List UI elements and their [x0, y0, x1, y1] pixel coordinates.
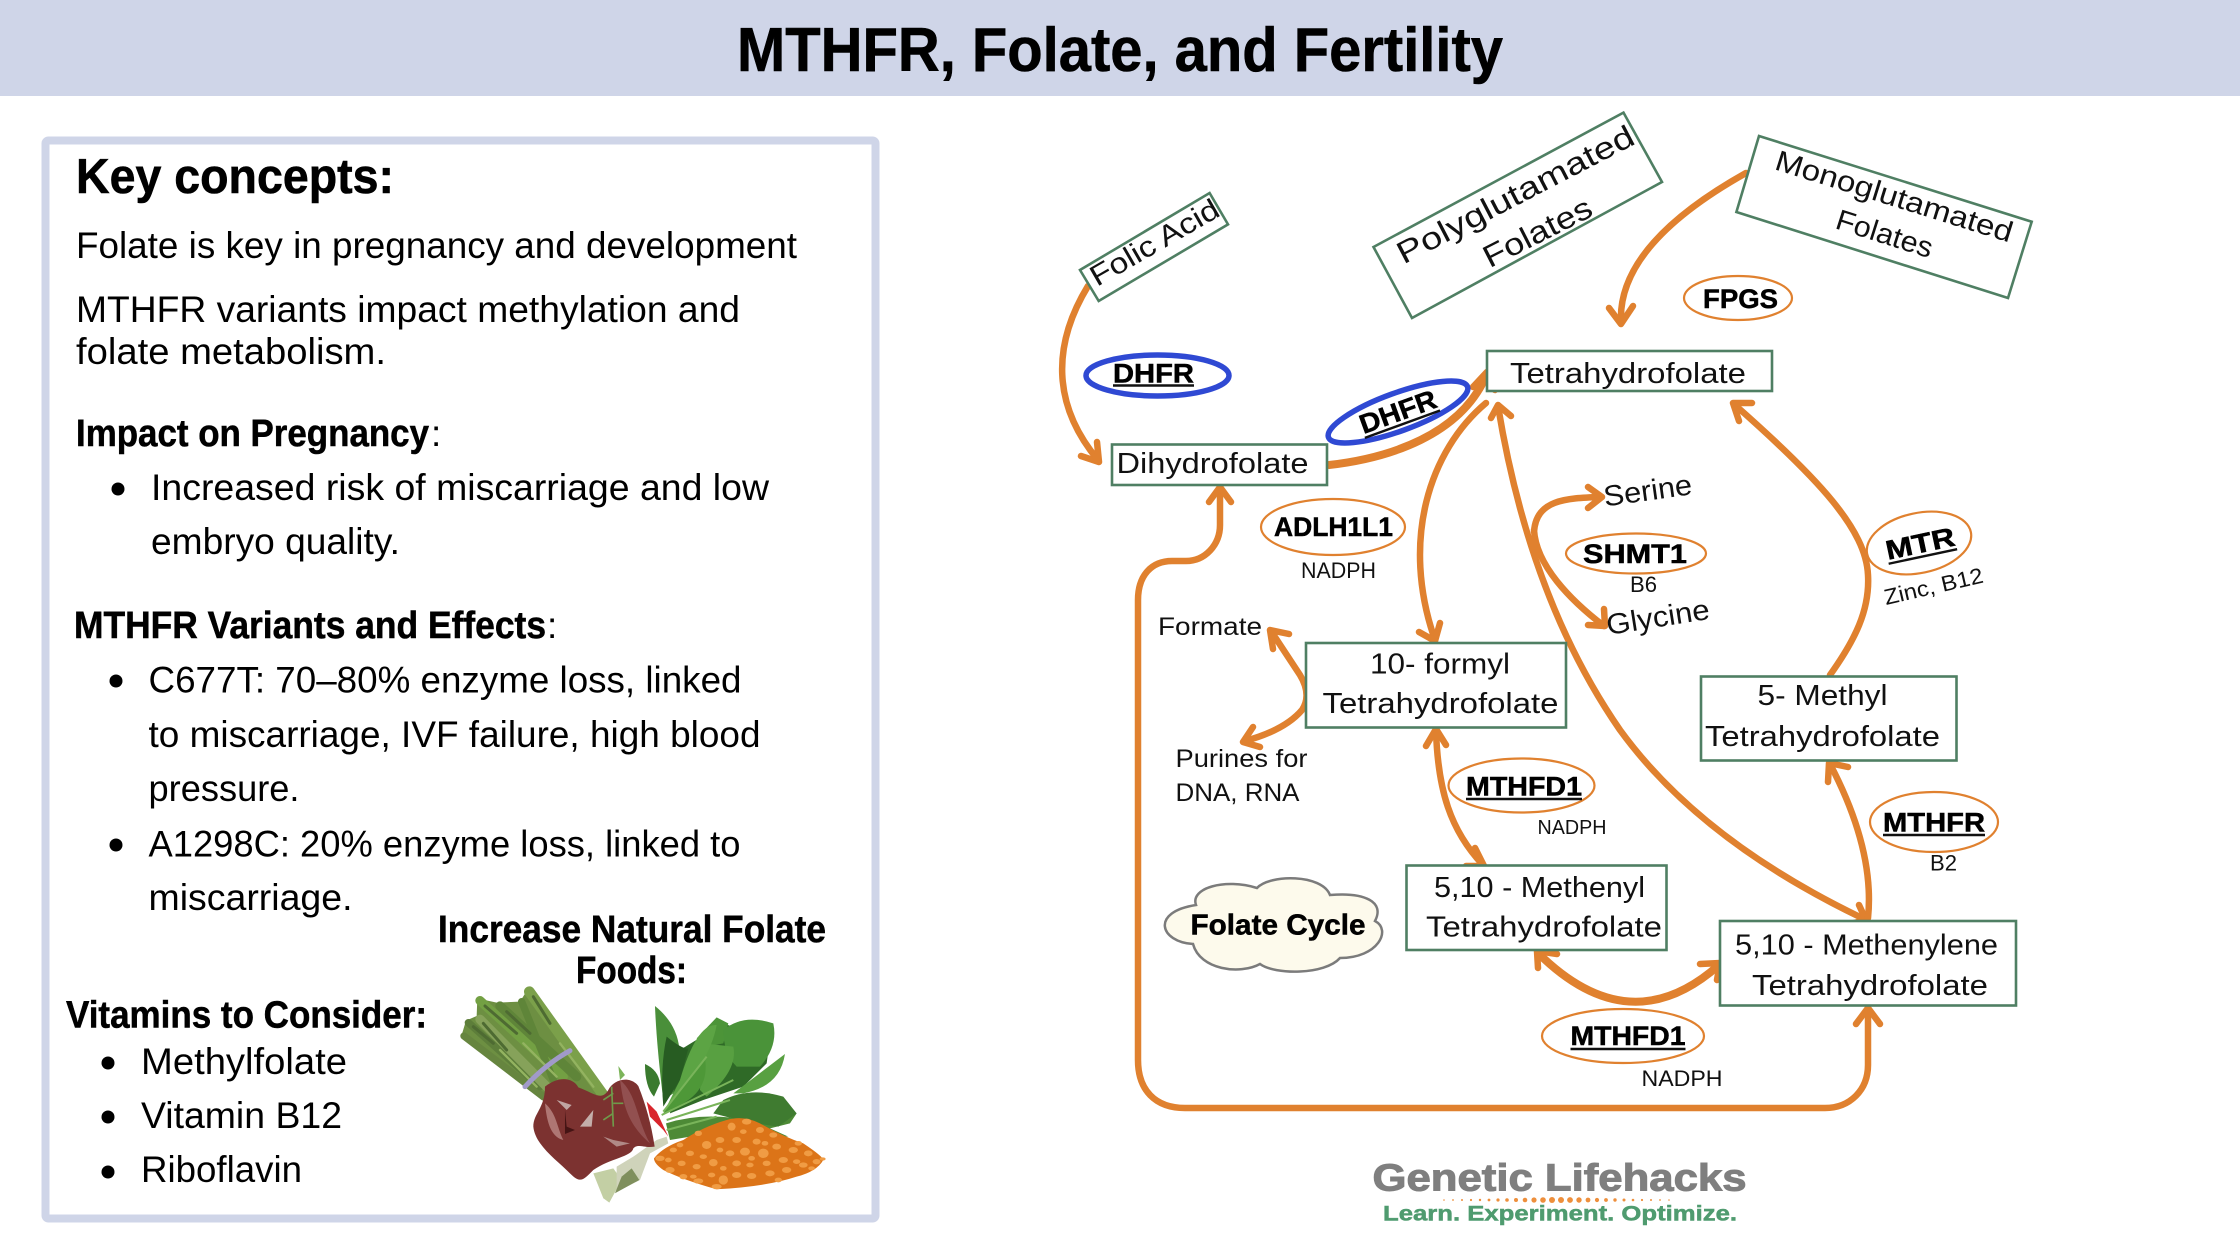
box: folic acid [1080, 193, 1228, 301]
box: 5,10-methenylene tetrahydrofolate [1720, 921, 2016, 1006]
enzyme: MTHFR with B2 [1870, 792, 1998, 876]
enzyme: MTHFD1 lower with NADPH [1542, 1009, 1722, 1091]
box: polyglutamated folates: Folates [1477, 190, 1598, 275]
enzyme: MTHFD1 upper with NADPH: MTHFD1 [1466, 772, 1582, 802]
box: 5,10-methenyl tetrahydrofolate [1406, 866, 1666, 950]
arrow: methenyl and methylene [1537, 951, 1720, 1002]
box: 10-formyl tetrahydrofolate: Tetrahydrofolate [1322, 688, 1558, 720]
box: polyglutamated folates: Polyglutamated [1391, 118, 1640, 271]
section: impact on pregnancy [76, 413, 769, 562]
box: 10-formyl tetrahydrofolate [1306, 643, 1566, 728]
enzyme: MTHFD1 lower with NADPH: NADPH [1642, 1066, 1722, 1091]
text: MTHFR variants [76, 289, 740, 372]
section: MTHFR variants and effects: miscarriage. [148, 877, 352, 918]
arrow: serine and glycine branch [1534, 487, 1605, 626]
arrow: 10-formyl and methenyl [1426, 729, 1484, 866]
heading: natural folate foods: Foods: [576, 950, 687, 992]
box: monoglutamated folates: Monoglutamated [1771, 145, 2017, 249]
section: impact on pregnancy: Increased risk of miscarriage and low [151, 467, 769, 508]
section: MTHFR variants and effects: to miscarriage, IVF failure, high blood [148, 714, 760, 755]
label: purines for DNA, RNA [1176, 745, 1308, 807]
arrow: 10-formyl to formate and purines [1243, 630, 1307, 747]
label: purines for DNA, RNA: DNA, RNA [1176, 779, 1300, 807]
box: dihydrofolate: Dihydrofolate [1116, 448, 1308, 480]
section: vitamins to consider: Riboflavin [141, 1149, 302, 1190]
enzyme: MTHFD1 upper with NADPH [1448, 758, 1606, 839]
arrow: tetrahydrofolate to 10-formyl [1419, 403, 1486, 641]
text: MTHFR variants: MTHFR variants impact methylation and [76, 289, 740, 330]
box: 5-methyl tetrahydrofolate: Tetrahydrofolate [1705, 721, 1940, 753]
icon: folate foods illustration [462, 988, 826, 1203]
box: monoglutamated folates: Folates [1832, 204, 1937, 265]
section: vitamins to consider: Vitamins to Consider: [66, 994, 427, 1036]
enzyme: MTR with zinc, B12: Zinc, B12 [1882, 563, 1986, 610]
enzyme: FPGS: FPGS [1703, 284, 1778, 314]
arrow: 5-methyl to methylene [1828, 763, 1869, 918]
arrow: dihydrofolate to tetrahydrofolate [1329, 372, 1495, 465]
section: vitamins to consider: Vitamin B12 [141, 1095, 342, 1136]
logo: Genetic Lifehacks: Learn. Experiment. Optimize. [1383, 1202, 1737, 1226]
arrow: monoglutamated to tetrahydrofolate [1609, 173, 1746, 324]
box: 5,10-methenyl tetrahydrofolate: Tetrahydrofolate [1426, 912, 1662, 944]
text: MTHFR variants: folate metabolism. [76, 331, 386, 372]
arrow: loop from methylene to dihydrofolate [1138, 487, 1880, 1108]
section: vitamins to consider [66, 994, 427, 1190]
logo: Genetic Lifehacks: Genetic Lifehacks [1372, 1158, 1746, 1200]
enzyme: ADLH1L1 with NADPH [1261, 499, 1405, 583]
heading: key concepts: Key concepts: [76, 150, 394, 204]
callout: folate cycle cloud [1165, 878, 1382, 972]
enzyme: MTHFD1 upper with NADPH: NADPH [1538, 817, 1606, 839]
section: MTHFR variants and effects: pressure. [148, 768, 300, 809]
section: MTHFR variants and effects [74, 605, 760, 918]
box: tetrahydrofolate [1487, 351, 1772, 391]
header banner [0, 0, 2240, 96]
title: MTHFR, Folate, and Fertility [737, 16, 1503, 85]
box: polyglutamated folates [1374, 113, 1662, 318]
enzyme: MTHFR with B2: MTHFR [1883, 808, 1985, 838]
callout: folate cycle cloud: Folate Cycle [1190, 910, 1366, 942]
box: dihydrofolate [1112, 444, 1327, 485]
diagram: folate cycle [1062, 113, 2032, 1108]
box: 5,10-methenylene tetrahydrofolate: Tetrahydrofolate [1752, 970, 1988, 1002]
enzyme: SHMT1 with B6: B6 [1630, 572, 1657, 597]
box: folic acid: Folic Acid [1084, 193, 1225, 293]
arrow: methylene to tetrahydrofolate [1491, 405, 1866, 924]
box: 5-methyl tetrahydrofolate: 5- Methyl [1758, 680, 1888, 712]
box: 5,10-methenylene tetrahydrofolate: 5,10 - Methenylene [1735, 930, 1998, 962]
enzyme: FPGS [1684, 276, 1792, 320]
enzyme: DHFR (dihydrofolate step) [1322, 369, 1474, 455]
logo: Genetic Lifehacks [1372, 1158, 1746, 1226]
enzyme: MTHFR with B2: B2 [1930, 850, 1957, 876]
box: 5,10-methenyl tetrahydrofolate: 5,10 - Methenyl [1434, 872, 1645, 904]
enzyme: MTHFD1 lower with NADPH: MTHFD1 [1570, 1021, 1686, 1051]
box: tetrahydrofolate: Tetrahydrofolate [1510, 358, 1746, 390]
label: purines for DNA, RNA: Purines for [1176, 745, 1308, 773]
enzyme: DHFR (folic acid step) [1086, 355, 1229, 396]
box: 10-formyl tetrahydrofolate: 10- formyl [1370, 648, 1510, 680]
enzyme: ADLH1L1 with NADPH: NADPH [1301, 558, 1376, 583]
label: formate: Formate [1158, 613, 1262, 641]
section: impact on pregnancy: Impact on Pregnancy [76, 413, 429, 455]
box: 5-methyl tetrahydrofolate [1701, 676, 1956, 760]
heading: natural folate foods: Increase Natural Folate [438, 909, 826, 951]
section: impact on pregnancy: embryo quality. [151, 521, 400, 562]
section: MTHFR variants and effects: MTHFR Variants and Effects [74, 605, 546, 647]
section: MTHFR variants and effects: A1298C: 20% enzyme loss, linked to [148, 824, 740, 864]
enzyme: ADLH1L1 with NADPH: ADLH1L1 [1274, 512, 1393, 542]
box: monoglutamated folates [1736, 136, 2032, 298]
section: impact on pregnancy: : [431, 413, 441, 454]
heading: natural folate foods [438, 909, 826, 992]
enzyme: MTR with zinc, B12 [1861, 503, 1986, 610]
section: MTHFR variants and effects: : [547, 605, 557, 646]
enzyme: SHMT1 with B6 [1566, 534, 1706, 597]
arrow: 5-methyl to tetrahydrofolate [1733, 403, 1868, 675]
section: MTHFR variants and effects: C677T: 70–80% enzyme loss, linked [148, 660, 742, 700]
enzyme: MTR with zinc, B12: MTR [1883, 522, 1958, 566]
enzyme: DHFR (folic acid step): DHFR [1113, 358, 1194, 388]
panel: key concepts [46, 140, 876, 1218]
text: folate importance: Folate is key in pregnancy and development [76, 225, 798, 266]
section: vitamins to consider: Methylfolate [141, 1041, 347, 1082]
enzyme: DHFR (dihydrofolate step): DHFR [1355, 384, 1441, 440]
label: glycine: Glycine [1604, 594, 1712, 642]
label: serine: Serine [1602, 469, 1694, 513]
arrow: folic acid to dihydrofolate [1062, 286, 1099, 462]
enzyme: SHMT1 with B6: SHMT1 [1583, 539, 1687, 569]
